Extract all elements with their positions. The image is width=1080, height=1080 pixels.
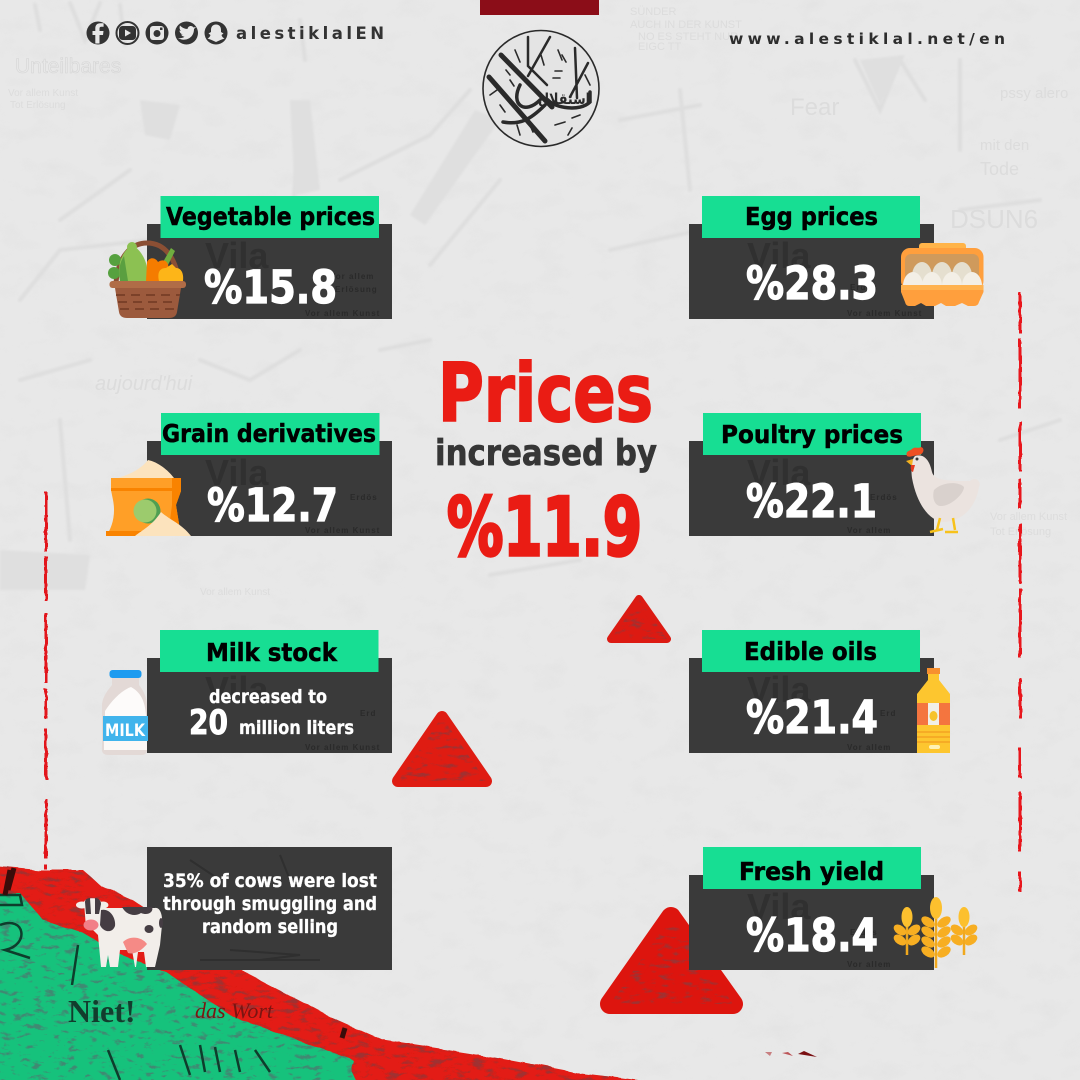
value: 15.8: %15.8: [204, 261, 337, 314]
label: fresh yield: [703, 847, 921, 889]
panel: edible oils: [689, 630, 934, 753]
value: 12.7: %12.7: [207, 479, 338, 532]
background paper: AUCH IN DER KUNST: [630, 19, 742, 31]
icon: cow: [76, 898, 163, 967]
label: egg prices: Egg prices: [745, 202, 878, 231]
background paper: NO ES STEHT NUR: [638, 31, 738, 43]
panel: milk stock: [147, 630, 392, 753]
torn red and green band, bottom left: [0, 865, 655, 1080]
green torn layer: [0, 893, 367, 1080]
panel: fresh yield: Vila: [747, 886, 811, 927]
text block: cows lost: random selling: [202, 916, 338, 938]
background paper: Tot Erlösung: [10, 100, 66, 111]
torn red and green band, bottom left: das Wort: [195, 998, 274, 1023]
red brush vertical line, left: [44, 492, 48, 870]
value: 28.3: %28.3: [746, 257, 878, 310]
panel: vegetable prices: Vor allem: [330, 272, 374, 281]
value: 20: 20: [189, 703, 228, 743]
background paper: aujourd'hui: [95, 373, 193, 395]
panel: grain derivatives: Erdös: [350, 493, 378, 502]
icon: twitter: [175, 22, 198, 44]
torn paint flecks, bottom: [765, 1051, 817, 1057]
icon: snapchat: [204, 22, 228, 44]
background paper: mit den: [980, 137, 1029, 154]
panel: grain derivatives: Vor allem Kunst: [305, 526, 380, 535]
heading: increased by: increased by: [435, 433, 657, 474]
panel: grain derivatives: [147, 413, 392, 536]
panel: egg prices: Vor allem Kunst: [847, 309, 922, 318]
panel: fresh yield: [689, 847, 934, 970]
panel: grain derivatives: Vila: [205, 452, 269, 493]
value: 22.1: %22.1: [746, 475, 877, 528]
icon: milk bottle: MILK: [105, 721, 146, 741]
panel: vegetable prices: Vila: [205, 235, 269, 276]
torn red and green band, bottom left: Niet!: [68, 993, 136, 1029]
label: poultry prices: Poultry prices: [721, 420, 903, 449]
label: poultry prices: [703, 413, 921, 455]
text block: cows lost: through smuggling and: [163, 893, 377, 915]
text: decreased to: decreased to: [209, 686, 327, 708]
panel: edible oils: Vor allem: [847, 743, 891, 752]
panel: vegetable prices: Vor allem Kunst: [305, 309, 380, 318]
icon: youtube: [116, 22, 138, 44]
background paper: pssy alero: [1000, 85, 1068, 102]
icon: chicken: [906, 447, 980, 532]
background paper: EIGC TT: [638, 41, 681, 53]
label: grain derivatives: [161, 413, 380, 455]
label: vegetable prices: Vegetable prices: [166, 202, 375, 231]
icon: instagram: [146, 22, 168, 44]
panel: edible oils: Vila: [747, 669, 811, 710]
label: milk stock: [160, 630, 378, 672]
background paper: DSUN6: [950, 204, 1038, 234]
text block: cows lost: [163, 870, 377, 938]
panel: milk stock: Vila: [205, 669, 269, 710]
panel: egg prices: [689, 196, 934, 319]
website url: www.alestiklal.net/en: [729, 30, 1005, 48]
red torn layer: [0, 865, 655, 1080]
red brush vertical line, right: [1018, 293, 1022, 908]
panel: cows lost: [147, 847, 392, 970]
panel: egg prices: Vila: [747, 235, 811, 276]
label: grain derivatives: Grain derivatives: [162, 419, 376, 448]
background paper: Unteilbares: [15, 55, 121, 78]
icon: flour sack: [106, 460, 191, 536]
social icons and handle: [86, 22, 384, 44]
top maroon tab: [480, 0, 599, 15]
panel: edible oils: Erd: [880, 709, 896, 718]
panel: poultry prices: Erdös: [870, 493, 898, 502]
icon: facebook: [86, 22, 110, 44]
panel: vegetable prices: Erlösung: [335, 285, 378, 294]
panel: poultry prices: Vor allem: [847, 526, 891, 535]
icon: vegetable basket: [108, 242, 186, 318]
red triangle medium: [398, 717, 486, 781]
panel: fresh yield: Vor allem: [847, 960, 891, 969]
background paper: Vor allem Kunst: [990, 511, 1067, 523]
icon: wheat: [892, 897, 979, 968]
background paper: Tode: [980, 159, 1019, 179]
label: edible oils: [702, 630, 920, 672]
panel: poultry prices: [689, 413, 934, 536]
label: milk stock: Milk stock: [206, 638, 338, 667]
label: vegetable prices: [160, 196, 379, 238]
background paper: Vor allem Kunst: [8, 88, 78, 99]
background paper: SÜNDER: [630, 6, 677, 18]
label: fresh yield: Fresh yield: [739, 857, 884, 886]
icon: egg carton: [901, 243, 984, 306]
label: edible oils: Edible oils: [744, 637, 877, 666]
label: egg prices: [702, 196, 920, 238]
panel: poultry prices: Vila: [747, 452, 811, 493]
panel: vegetable prices: [147, 196, 392, 319]
red triangle large: [610, 917, 733, 1004]
big number: %11.9: %11.9: [447, 481, 642, 574]
background paper: Fear: [790, 94, 839, 121]
social handle: alestiklalEN: [236, 24, 384, 43]
value: 21.4: %21.4: [746, 691, 878, 744]
icon: oil bottle: [917, 668, 950, 753]
logo: calligraphy emblem: استقلال: [538, 90, 590, 108]
panel: fresh yield: Erdös: [850, 928, 878, 937]
background paper: Tot Erlösung: [990, 526, 1051, 538]
icon: milk bottle: [102, 670, 148, 755]
text block: cows lost: 35% of cows were lost: [163, 870, 377, 892]
value: 18.4: %18.4: [746, 909, 878, 962]
text: million liters: million liters: [239, 717, 354, 739]
logo: calligraphy emblem: [483, 30, 599, 146]
center headline: [435, 347, 657, 574]
heading: Prices: Prices: [438, 347, 653, 440]
red triangle small: [611, 599, 667, 639]
panel: egg prices: Erdös: [850, 283, 878, 292]
background paper: Vor allem Kunst: [200, 587, 270, 598]
panel: milk stock: Vor allem Kunst: [305, 743, 380, 752]
panel: milk stock: Erd: [360, 709, 376, 718]
scribbles on band: [0, 895, 270, 1080]
